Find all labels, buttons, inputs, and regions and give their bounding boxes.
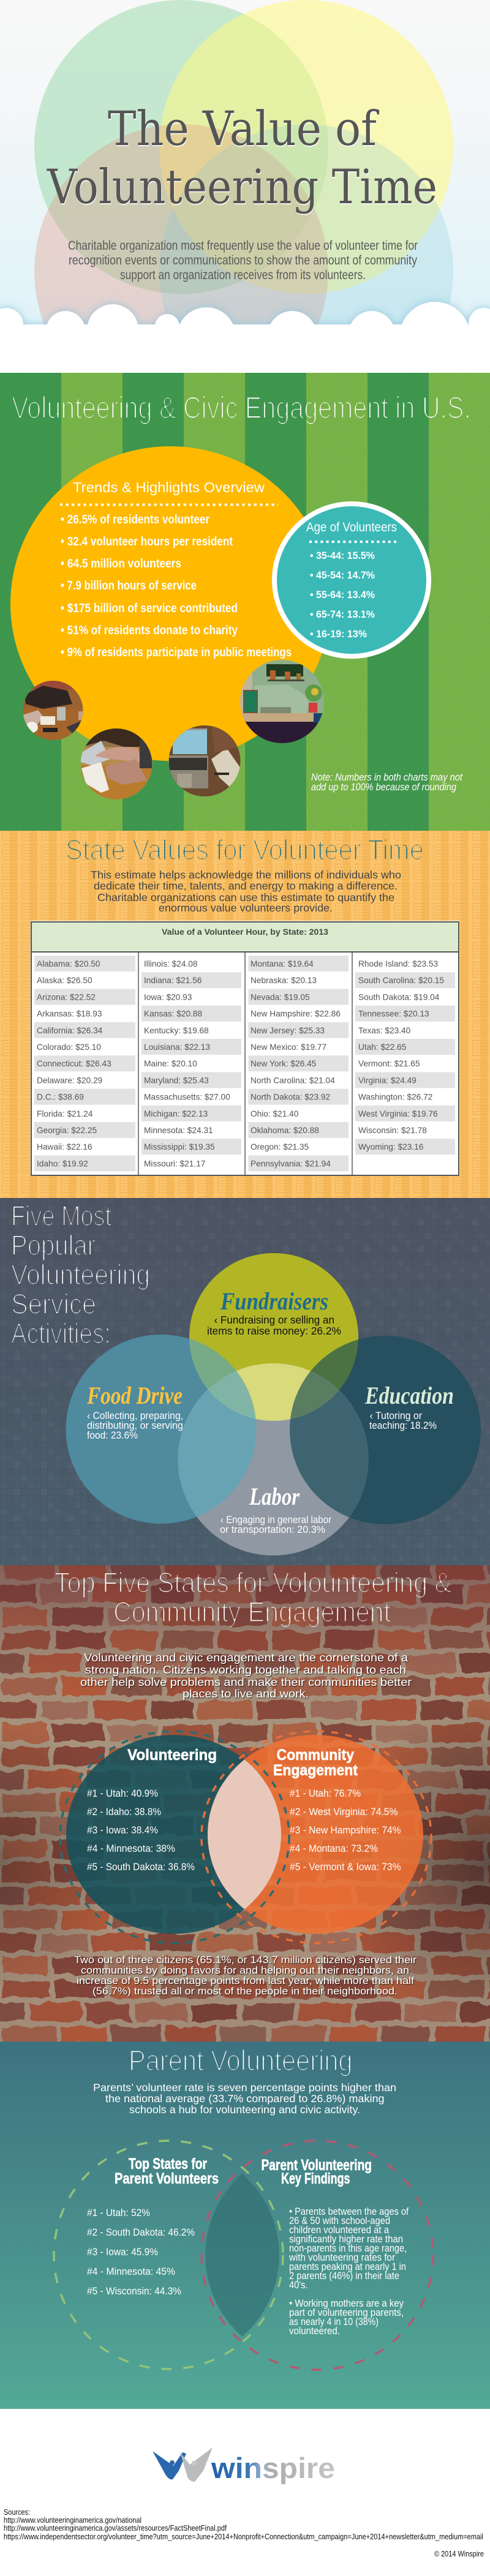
closing text: (56.7%) trusted all or most of the people in their neighborhood.: [92, 1986, 398, 1997]
food drive: [86, 1382, 183, 1441]
top states list: #1 - Utah: 52%: [87, 2207, 150, 2218]
column 2: Michigan: $22.13: [144, 1109, 208, 1118]
section heading: [55, 1567, 451, 1628]
section heading: Five Most: [11, 1200, 111, 1232]
key findings: 2 parents (46%) in their late: [289, 2271, 399, 2282]
labor: or transportation: 20.3%: [220, 1524, 325, 1535]
volunteering list: #1 - Utah: 40.9%: [87, 1788, 158, 1799]
section heading: Parent Volunteering: [129, 2044, 353, 2076]
logo: winspire: [153, 2447, 335, 2484]
column 3: Oklahoma: $20.88: [251, 1126, 319, 1135]
volunteering list: [87, 1747, 217, 1873]
description: Charitable organizations can use this estimate to quantify the: [97, 891, 394, 904]
description: the national average (33.7% compared to 26.8%) making: [105, 2092, 385, 2105]
column 1: California: $26.34: [37, 1026, 103, 1035]
top states list: #5 - Wisconsin: 44.3%: [87, 2285, 181, 2297]
column 4: Tennessee: $20.13: [358, 1009, 429, 1019]
section heading: Activities:: [11, 1317, 111, 1349]
note: Note: Numbers in both charts may not: [311, 771, 463, 783]
sources: [4, 2507, 483, 2541]
key findings: significantly higher rate than: [289, 2234, 403, 2245]
labor: Labor: [249, 1483, 300, 1510]
fundraisers: [207, 1287, 341, 1337]
top states list: [87, 2155, 219, 2297]
table heading: Value of a Volunteer Hour, by State: 2013: [162, 927, 328, 937]
community engagement list: [273, 1747, 401, 1873]
overview bullet list: • 32.4 volunteer hours per resident: [61, 535, 233, 549]
food drive: ‹ Collecting, preparing,: [87, 1410, 183, 1421]
top states list: Top States for: [129, 2155, 207, 2173]
title: Volunteering Time: [47, 160, 437, 215]
column 1: Hawaii: $22.16: [37, 1142, 92, 1151]
column 1: Delaware: $20.29: [37, 1076, 102, 1085]
volunteering list: #4 - Minnesota: 38%: [87, 1843, 175, 1854]
photo: hands on desk: [81, 728, 153, 801]
column 4: South Carolina: $20.15: [358, 976, 444, 985]
sources: http://www.volunteeringinamerica.gov/assets/resources/FactSheetFinal.pdf: [4, 2523, 227, 2533]
panel: most popular activities: [0, 1198, 490, 1565]
top states list: #4 - Minnesota: 45%: [87, 2266, 175, 2277]
labor: ‹ Engaging in general labor: [221, 1515, 331, 1526]
overview bullet list: • 51% of residents donate to charity: [61, 624, 238, 637]
note: add up to 100% because of rounding: [311, 781, 456, 793]
description: dedicate their time, talents, and energy to making a difference.: [94, 880, 398, 892]
food drive: food: 23.6%: [87, 1430, 138, 1441]
age list: • 55-64: 13.4%: [310, 589, 375, 601]
overview bullet list: • $175 billion of service contributed: [61, 602, 238, 615]
panel: volunteering and civic engagement: [0, 373, 490, 831]
description: [93, 2081, 396, 2116]
community engagement list: #3 - New Hampshire: 74%: [290, 1824, 401, 1836]
column 1: D.C.: $38.69: [37, 1093, 84, 1102]
column 4: Wisconsin: $21.78: [358, 1126, 427, 1135]
title: The Value of: [108, 102, 380, 157]
fundraisers: Fundraisers: [220, 1287, 328, 1315]
column 3: Oregon: $21.35: [251, 1142, 309, 1151]
photo: meeting at table: [23, 681, 84, 741]
volunteering list: Volunteering: [127, 1747, 217, 1764]
column 2: Louisiana: $22.13: [144, 1043, 210, 1052]
column 3: New York: $26.45: [251, 1059, 317, 1068]
description: enormous value volunteers provide.: [159, 902, 333, 914]
volunteering list: #5 - South Dakota: 36.8%: [87, 1861, 195, 1873]
volunteering list: #3 - Iowa: 38.4%: [87, 1824, 158, 1836]
column 2: Massachusetts: $27.00: [144, 1093, 230, 1102]
description: This estimate helps acknowledge the millions of individuals who: [91, 869, 401, 881]
column 3: North Carolina: $21.04: [251, 1076, 335, 1085]
column 2: Mississippi: $19.35: [144, 1142, 215, 1151]
volunteering list: #2 - Idaho: 38.8%: [87, 1806, 161, 1818]
column 4: Virginia: $24.49: [358, 1076, 417, 1085]
closing text: Two out of three citizens (65.1%, or 143.7 million citizens) served their: [74, 1955, 417, 1966]
panel: parent volunteering: [0, 2042, 490, 2409]
closing text: communities by doing favors for and helping out their neighbors, an: [81, 1965, 409, 1976]
community engagement list: #4 - Montana: 73.2%: [290, 1843, 378, 1854]
overview bullet list: [61, 513, 292, 659]
column 3: [251, 959, 341, 1168]
column 4: Rhode Island: $23.53: [358, 959, 439, 968]
intro text: [68, 239, 418, 282]
orange overview circle: [10, 446, 330, 761]
column 2: Iowa: $20.93: [144, 992, 192, 1002]
key findings: Key Findings: [281, 2170, 350, 2187]
panel: top five states: [0, 1543, 490, 2063]
column 4: Utah: $22.65: [358, 1043, 407, 1052]
section heading: Popular: [11, 1229, 96, 1261]
key findings: part of volunteering parents,: [289, 2307, 404, 2318]
column 2: [144, 959, 230, 1168]
overview bullet list: • 26.5% of residents volunteer: [61, 513, 209, 526]
overview heading: Trends & Highlights Overview: [73, 479, 265, 495]
venn: activities: [66, 1253, 481, 1556]
education: Education: [364, 1382, 454, 1409]
community engagement list: Community: [277, 1747, 354, 1764]
column 1: Alaska: $26.50: [37, 976, 92, 985]
intro text: Charitable organization most frequently use the value of volunteer time for: [68, 239, 418, 253]
panel: state values: [0, 831, 490, 1198]
key findings: volunteered.: [289, 2326, 340, 2337]
section heading: Volunteering: [11, 1259, 150, 1290]
photo: cafe wall: [240, 660, 325, 744]
section heading: Service: [11, 1288, 96, 1320]
column 3: New Mexico: $19.77: [251, 1043, 326, 1052]
education: ‹ Tutoring or: [370, 1410, 422, 1421]
column 4: West Virginia: $19.76: [358, 1109, 438, 1118]
community engagement list: #5 - Vermont & Iowa: 73%: [290, 1861, 401, 1873]
column 3: Nevada: $19.05: [251, 992, 310, 1002]
intro text: [80, 1651, 412, 1700]
column 3: North Dakota: $23.92: [251, 1093, 330, 1102]
description: [91, 869, 401, 914]
intro text: other help solve problems and make their communities better: [80, 1676, 412, 1688]
intro text: support an organization receives from its volunteers.: [120, 268, 366, 282]
education: [364, 1382, 454, 1431]
section heading: State Values for Volunteer Time: [66, 834, 424, 866]
community engagement list: #1 - Utah: 76.7%: [290, 1788, 361, 1799]
key findings: 26 & 50 with school-aged: [289, 2215, 390, 2226]
key findings: 40's.: [289, 2280, 307, 2291]
description: schools a hub for volunteering and civic activity.: [129, 2103, 360, 2116]
column 2: Minnesota: $24.31: [144, 1126, 213, 1135]
age list: • 35-44: 15.5%: [310, 550, 375, 561]
sources: Sources:: [4, 2507, 30, 2517]
closing text: [74, 1955, 417, 1997]
column 1: Connecticut: $26.43: [37, 1059, 111, 1068]
title: [47, 102, 437, 215]
column 1: Alabama: $20.50: [37, 959, 100, 968]
overview bullet list: • 7.9 billion hours of service: [61, 579, 197, 593]
column 3: New Hampshire: $22.86: [251, 1009, 341, 1019]
venn: parents: [54, 2141, 433, 2370]
key findings: • Parents between the ages of: [289, 2206, 409, 2217]
food drive: Food Drive: [86, 1382, 183, 1409]
column 4: Washington: $26.72: [358, 1093, 432, 1102]
column 1: [37, 959, 111, 1168]
intro text: strong nation. Citizens working together and talking to each: [85, 1663, 406, 1676]
sources: http://www.volunteeringinamerica.gov/national: [4, 2515, 141, 2525]
section heading: Top Five States for Volounteering &: [55, 1567, 451, 1598]
table: value by state: [31, 921, 459, 1176]
age list: • 16-19: 13%: [310, 628, 367, 640]
column 3: New Jersey: $25.33: [251, 1026, 325, 1035]
column 2: Kansas: $20.88: [144, 1009, 203, 1019]
community engagement list: #2 - West Virginia: 74.5%: [290, 1806, 398, 1818]
logo: winspire: winspire: [211, 2452, 335, 2484]
column 2: Illinois: $24.08: [144, 959, 198, 968]
column 1: Idaho: $19.92: [37, 1159, 88, 1168]
column 2: Missouri: $21.17: [144, 1159, 205, 1168]
note: [311, 771, 463, 793]
overview bullet list: • 64.5 million volunteers: [61, 557, 181, 571]
labor: [220, 1483, 331, 1535]
key findings: non-parents in this age range,: [289, 2243, 407, 2254]
education: teaching: 18.2%: [369, 1420, 437, 1431]
column 4: [358, 959, 444, 1151]
key findings: [261, 2157, 409, 2337]
column 3: Montana: $19.64: [251, 959, 314, 968]
column 1: Georgia: $22.25: [37, 1126, 97, 1135]
column 4: Texas: $23.40: [358, 1026, 411, 1035]
column 4: Vermont: $21.65: [358, 1059, 420, 1068]
column 1: Arkansas: $18.93: [37, 1009, 102, 1019]
column 4: Wyoming: $23.16: [358, 1142, 424, 1151]
intro text: places to live and work.: [183, 1687, 309, 1700]
clouds: [0, 302, 490, 392]
column 3: Nebraska: $20.13: [251, 976, 317, 985]
age list: • 45-54: 14.7%: [310, 569, 375, 581]
column 2: Kentucky: $19.68: [144, 1026, 209, 1035]
key findings: Parent Volunteering: [261, 2157, 372, 2174]
food drive: distributing, or serving: [87, 1420, 183, 1431]
column 3: Ohio: $21.40: [251, 1109, 299, 1118]
column 1: Colorado: $25.10: [37, 1043, 101, 1052]
key findings: with volunteering rates for: [288, 2252, 395, 2263]
fundraisers: items to raise money: 26.2%: [207, 1325, 341, 1337]
top states list: #3 - Iowa: 45.9%: [87, 2246, 158, 2258]
section heading: [11, 1200, 150, 1349]
key findings: as nearly 4 in 10 (38%): [289, 2316, 379, 2327]
panel: title header: [0, 0, 490, 324]
column 2: Maine: $20.10: [144, 1059, 197, 1068]
top states list: Parent Volunteers: [115, 2170, 219, 2187]
venn: states: [60, 1731, 431, 1943]
section heading: Community Engagement: [113, 1596, 391, 1628]
age heading: Age of Volunteers: [306, 520, 397, 534]
intro text: recognition events or communications to show the amount of community: [69, 253, 417, 268]
column 1: Arizona: $22.52: [37, 992, 96, 1002]
column 4: South Dakota: $19.04: [358, 992, 440, 1002]
top states list: #2 - South Dakota: 46.2%: [87, 2226, 195, 2238]
age of volunteers circle: [274, 504, 429, 656]
closing text: increase of 9.5 percentage points from last year, while more than half: [77, 1975, 414, 1986]
photo: laptop and notebook: [168, 725, 241, 798]
intro text: Volunteering and civic engagement are the cornerstone of a: [84, 1651, 409, 1664]
community engagement list: Engagement: [273, 1762, 358, 1779]
column 2: Maryland: $25.43: [144, 1076, 209, 1085]
column 2: Indiana: $21.56: [144, 976, 202, 985]
key findings: parents peaking at nearly 1 in: [289, 2261, 406, 2272]
column 3: Pennsylvania: $21.94: [251, 1159, 331, 1168]
overview bullet list: • 9% of residents participate in public meetings: [61, 646, 292, 659]
description: Parents’ volunteer rate is seven percentage points higher than: [93, 2081, 396, 2094]
key findings: • Working mothers are a key: [289, 2298, 404, 2309]
fundraisers: ‹ Fundraising or selling an: [214, 1314, 334, 1326]
age list: • 65-74: 13.1%: [310, 608, 375, 620]
column 1: Florida: $21.24: [37, 1109, 93, 1118]
age list: [310, 550, 375, 640]
key findings: children volunteered at a: [289, 2225, 390, 2236]
